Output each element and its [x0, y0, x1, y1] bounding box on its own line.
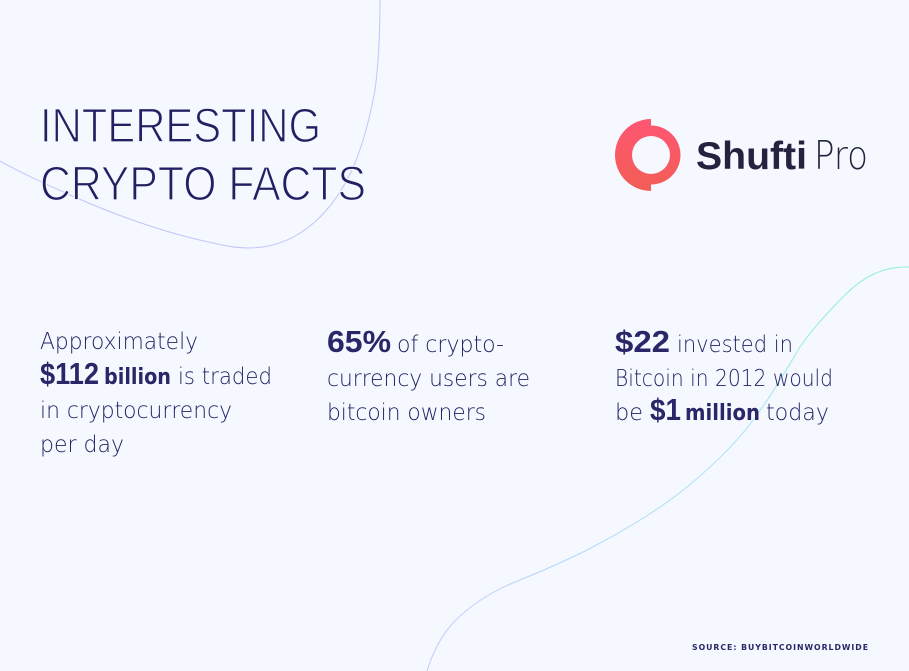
logo wordmark: Pro: Pro [814, 134, 868, 179]
title line 1: INTERESTING [40, 100, 321, 153]
text line: be [615, 400, 643, 426]
text line: is traded [178, 364, 272, 390]
stat: million: million [685, 401, 760, 426]
stat: $112: $112 [40, 356, 99, 391]
text line: today [766, 400, 829, 426]
logo wordmark: Shufti: Shufti [696, 135, 807, 178]
text line: currency users are [327, 366, 530, 392]
text line: per day [40, 432, 124, 458]
fact: 112 billion traded [40, 329, 272, 458]
text line: Approximately [40, 329, 198, 355]
logo: Shufti Pro [615, 119, 868, 191]
text line: bitcoin owners [327, 400, 486, 426]
stat: 65%: 65% [327, 324, 391, 359]
decorative curve: top left [0, 0, 380, 248]
title line 2: CRYPTO FACTS [40, 158, 366, 211]
decorative curve: bottom right [427, 267, 909, 671]
text line: in cryptocurrency [40, 398, 232, 424]
stat: $22: $22 [615, 324, 670, 359]
source note: SOURCE: BUYBITCOINWORLDWIDE [692, 643, 869, 652]
text line: of crypto- [397, 332, 504, 358]
fact: $22 invested [615, 324, 833, 427]
title [40, 100, 366, 211]
stat: billion: billion [104, 365, 171, 390]
text line: Bitcoin in 2012 would [615, 366, 833, 392]
text line: invested in [677, 332, 793, 358]
stat: $1: $1 [650, 392, 681, 427]
fact: 65% bitcoin owners [327, 324, 530, 426]
icon: logo ring [615, 119, 680, 191]
